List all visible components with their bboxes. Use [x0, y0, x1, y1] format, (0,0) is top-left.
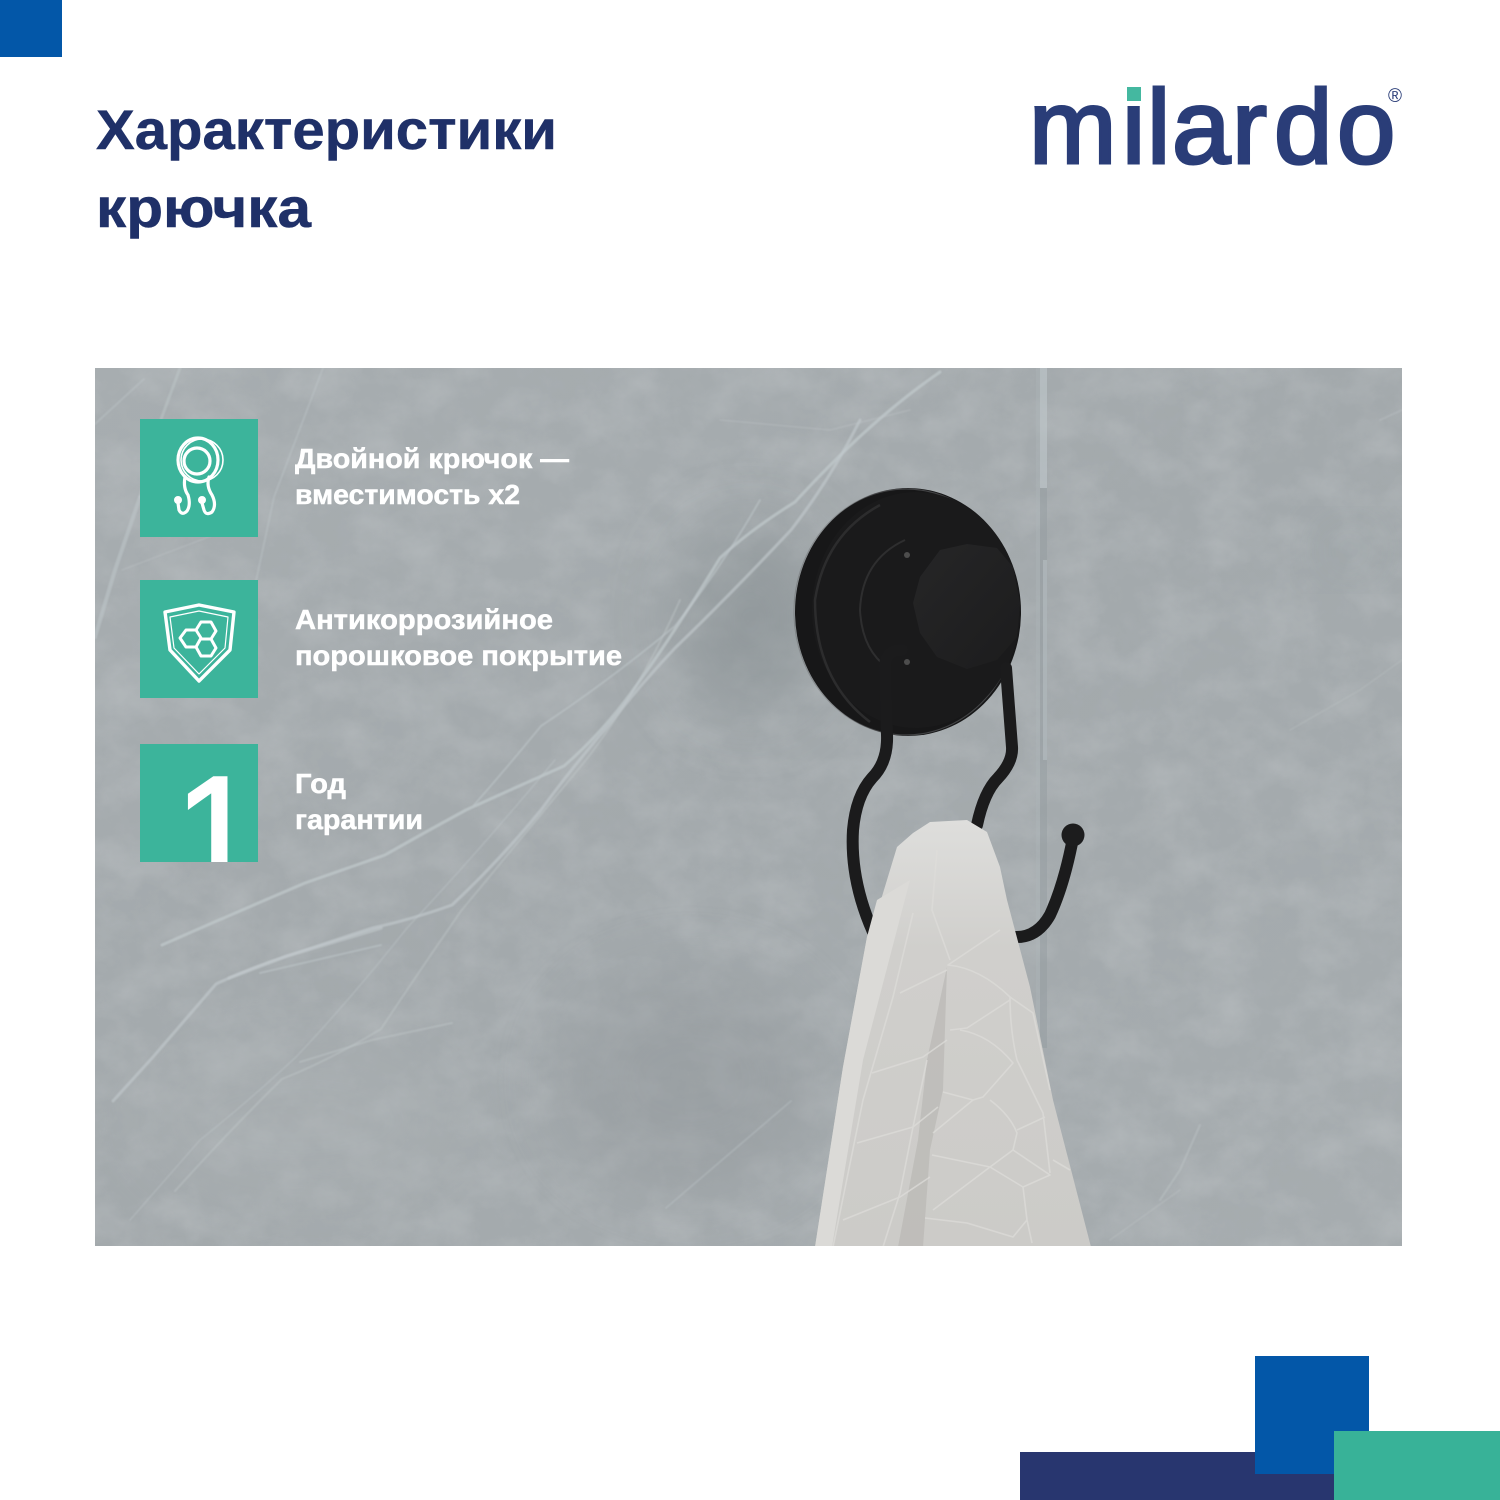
feature 1: text: Двойной крючок —: [295, 443, 569, 474]
feature 2: text: порошковое покрытие: [295, 640, 622, 671]
logo: milardo: milardo: [1029, 69, 1395, 186]
icon: shield with honeycomb: [165, 605, 234, 681]
feature 3: icon tile one year: 1: [175, 745, 258, 913]
hook: wire arms: [853, 650, 1073, 937]
hook: ball tip: [1062, 824, 1084, 846]
feature 2: text: [295, 604, 622, 671]
panel: photo of hook on marble wall: [95, 368, 1402, 1247]
feature 2: text: Антикоррозийное: [295, 604, 553, 635]
feature 1: text: [295, 443, 569, 510]
title: [96, 98, 557, 239]
icon: double hook: [176, 438, 223, 514]
feature 3: text: гарантии: [295, 804, 423, 835]
title: крючка: [96, 176, 312, 239]
marble veins: [95, 368, 1200, 1208]
feature 2: icon tile shield: [140, 580, 258, 698]
logo: milardo: ®: [1388, 86, 1402, 107]
feature 3: icon tile one year: [140, 744, 258, 862]
feature 3: text: [295, 768, 423, 835]
hook: octagonal knob: [913, 544, 994, 632]
hook: suction cup base: [794, 488, 1021, 736]
glass edge line: [1040, 368, 1047, 1048]
feature 1: text: вместимость х2: [295, 479, 520, 510]
marble wall background: [95, 368, 1402, 1246]
title: Характеристики: [96, 98, 557, 161]
feature 3: text: Год: [295, 768, 346, 799]
feature 1: icon tile double hook: [140, 419, 258, 537]
corner square: top left: [0, 0, 62, 57]
towel: [815, 820, 1091, 1247]
corner blocks: bottom right: [1020, 1356, 1500, 1500]
